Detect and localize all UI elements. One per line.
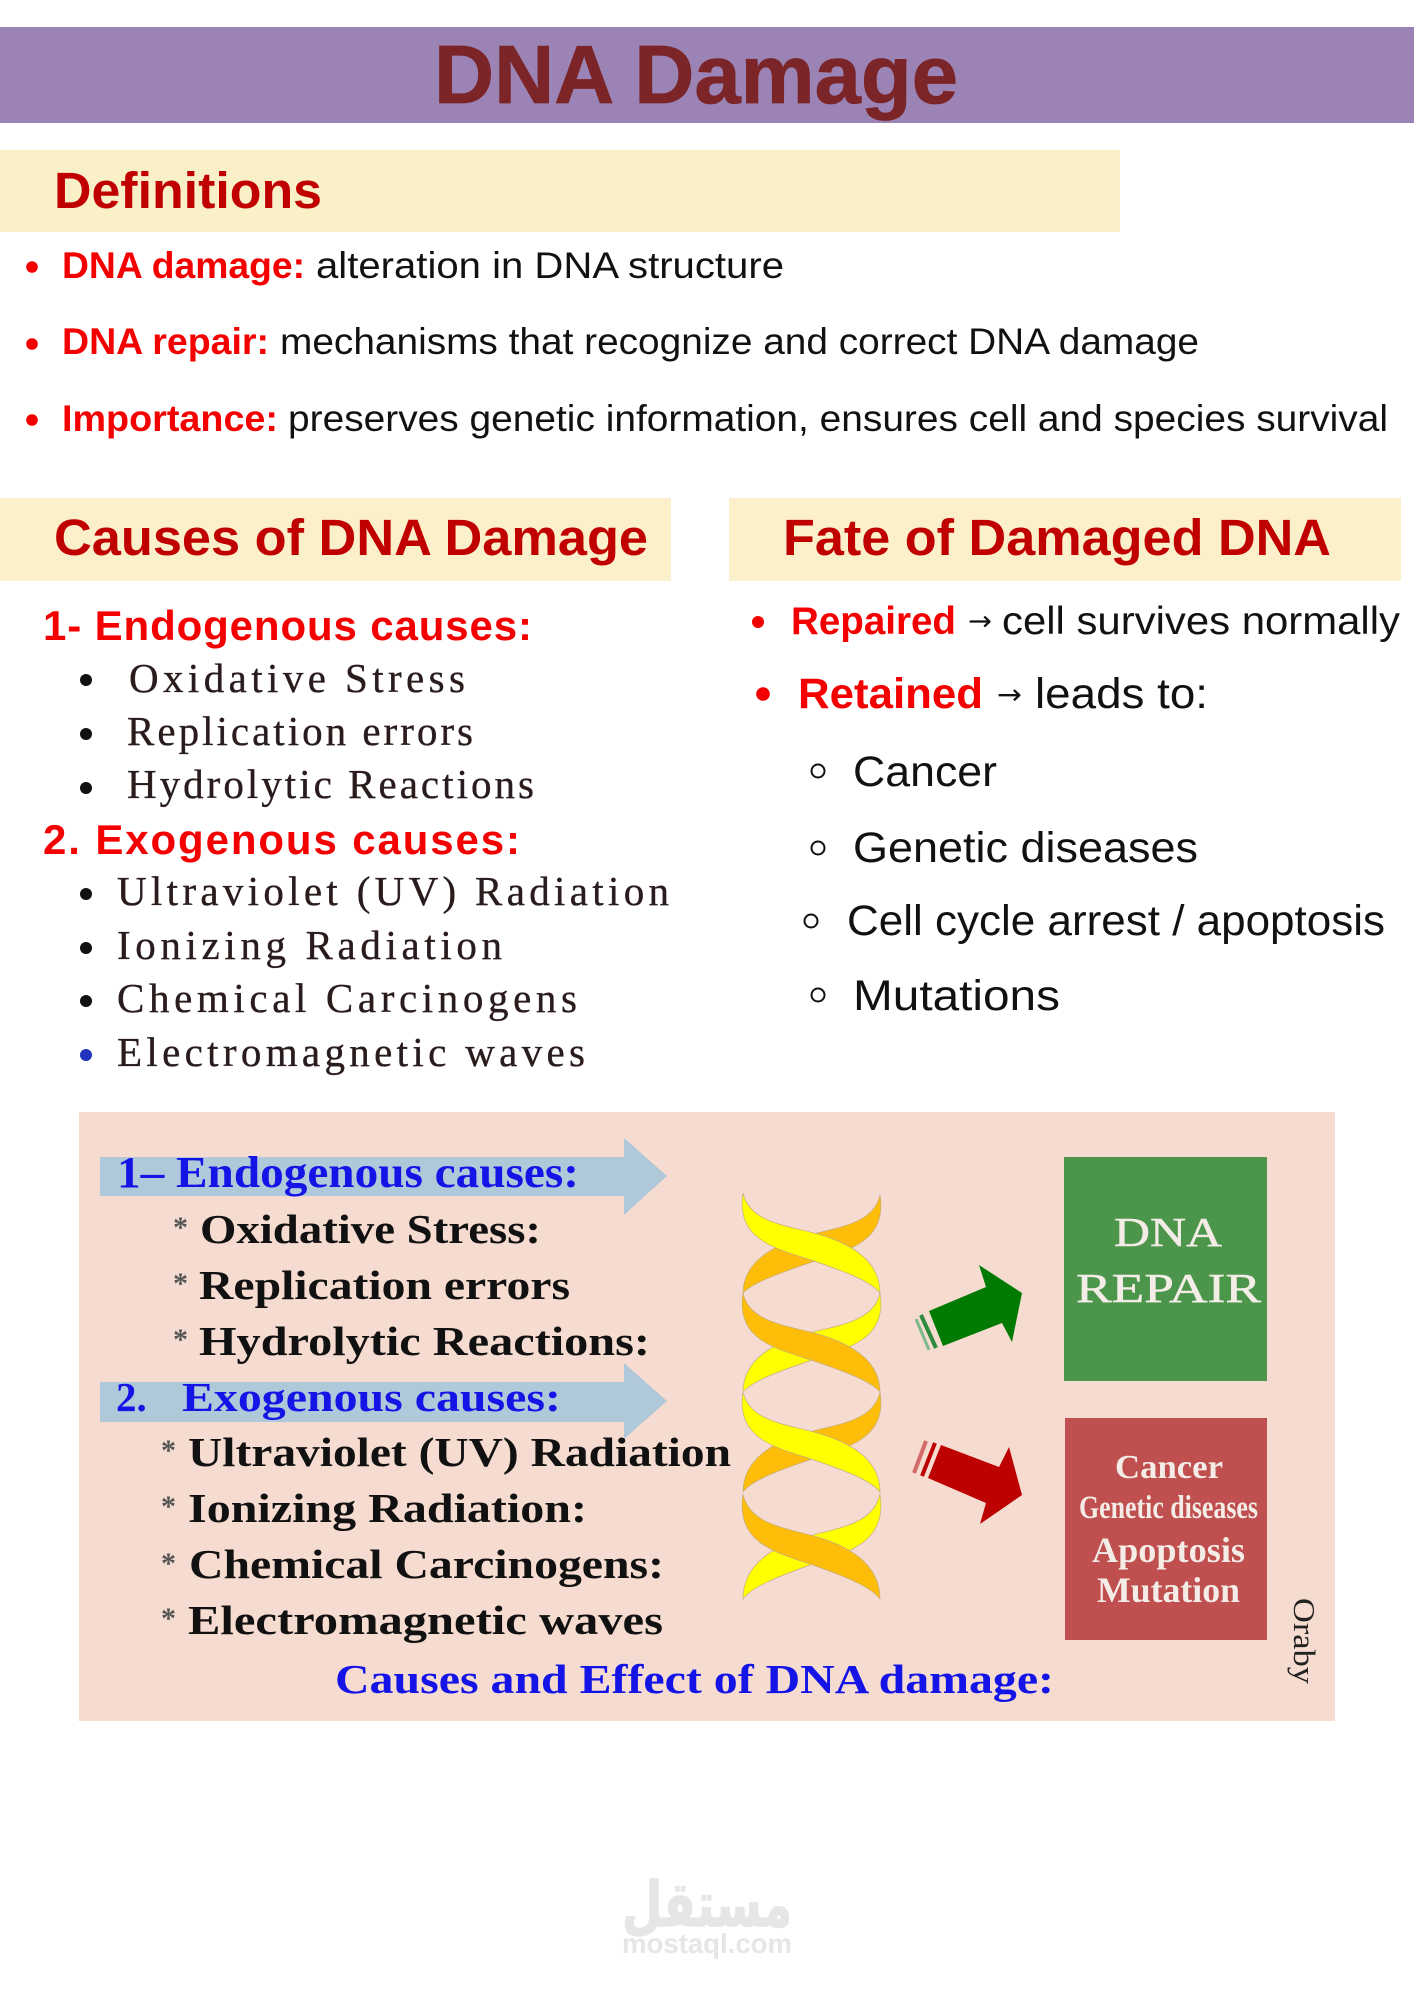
causes list: Electromagnetic waves xyxy=(117,1029,585,1075)
icon: DNA double helix xyxy=(742,1193,881,1599)
fate list: Repaired xyxy=(791,600,956,643)
fate list: cell survives normally xyxy=(1002,600,1401,643)
endogenous causes text: Hydrolytic Reactions: xyxy=(199,1318,650,1364)
definitions list xyxy=(26,245,1388,439)
box: DNA repair: DNA xyxy=(1114,1209,1222,1255)
exogenous causes text: Ultraviolet (UV) Radiation xyxy=(188,1429,731,1475)
heading: Definitions xyxy=(0,150,1120,232)
heading: Causes of DNA Damage xyxy=(0,498,671,581)
endogenous causes text: 1– Endogenous causes: xyxy=(117,1148,579,1197)
box: DNA repair xyxy=(1064,1157,1267,1381)
fate list: Mutations xyxy=(853,972,1060,1020)
arrow: exogenous banner xyxy=(100,1363,667,1439)
fate list: → xyxy=(968,606,992,637)
arrow: endogenous banner xyxy=(100,1138,667,1215)
exogenous causes text: Electromagnetic waves xyxy=(188,1597,663,1643)
credit: Oraby: Oraby xyxy=(1287,1598,1322,1685)
definitions list: mechanisms that recognize and correct DNA damage xyxy=(280,321,1199,362)
box: outcomes of retained damage: Cancer xyxy=(1115,1449,1223,1486)
definitions list: DNA repair: xyxy=(62,321,269,362)
fate list: Cancer xyxy=(853,748,997,796)
watermark: mostaql xyxy=(622,1868,792,1959)
causes list: Hydrolytic Reactions xyxy=(127,761,534,807)
box: outcomes of retained damage: Mutation xyxy=(1097,1570,1240,1610)
watermark: mostaql: مستقل xyxy=(622,1868,792,1941)
endogenous causes text xyxy=(117,1148,650,1364)
endogenous causes text: * xyxy=(173,1267,188,1300)
exogenous causes text: 2. xyxy=(116,1374,147,1420)
panel: causes and effect diagram xyxy=(79,1112,1335,1721)
exogenous causes text: Ionizing Radiation: xyxy=(188,1485,587,1531)
endogenous causes text: Oxidative Stress: xyxy=(200,1206,541,1252)
caption: Causes and Effect of DNA damage: xyxy=(335,1656,1054,1702)
arrow: red to damage outcomes xyxy=(914,1441,1022,1524)
definitions list: Importance: xyxy=(62,398,278,439)
endogenous causes text: * xyxy=(173,1323,188,1356)
box: outcomes of retained damage: Apoptosis xyxy=(1092,1530,1245,1570)
fate list: Cell cycle arrest / apoptosis xyxy=(847,897,1385,945)
fate list xyxy=(752,600,1401,1020)
causes list: Chemical Carcinogens xyxy=(117,975,577,1021)
watermark: mostaql: mostaql.com xyxy=(622,1928,792,1959)
title banner: DNA Damage xyxy=(434,28,958,121)
exogenous causes text: Exogenous causes: xyxy=(182,1374,561,1420)
endogenous causes text: * xyxy=(173,1211,188,1244)
title banner xyxy=(0,27,1414,123)
causes list: Oxidative Stress xyxy=(129,655,465,701)
exogenous causes text: Chemical Carcinogens: xyxy=(189,1541,664,1587)
box: outcomes of retained damage: Genetic diseases xyxy=(1079,1490,1258,1526)
fate list: Genetic diseases xyxy=(853,824,1198,872)
endogenous causes text: Replication errors xyxy=(199,1262,570,1308)
causes list: Ionizing Radiation xyxy=(117,922,502,968)
arrow: green to repair xyxy=(916,1265,1022,1350)
box: outcomes of retained damage xyxy=(1065,1418,1267,1640)
heading: Causes of DNA Damage: Causes of DNA Damage xyxy=(54,509,648,566)
causes list: Ultraviolet (UV) Radiation xyxy=(117,868,669,914)
causes list: 2. Exogenous causes: xyxy=(43,816,520,863)
fate list: leads to: xyxy=(1035,670,1208,718)
fate list: → xyxy=(997,678,1022,711)
exogenous causes text: * xyxy=(161,1602,176,1635)
exogenous causes text: * xyxy=(161,1547,176,1580)
heading: Definitions: Definitions xyxy=(54,162,322,219)
causes list: 1- Endogenous causes: xyxy=(43,602,532,649)
definitions list: preserves genetic information, ensures cell and species survival xyxy=(288,398,1388,439)
heading: Fate of Damaged DNA xyxy=(729,498,1401,581)
definitions list: alteration in DNA structure xyxy=(316,245,784,286)
exogenous causes text: * xyxy=(161,1434,176,1467)
exogenous causes text xyxy=(116,1374,731,1643)
exogenous causes text: * xyxy=(161,1490,176,1523)
causes list: Replication errors xyxy=(127,708,473,754)
causes list xyxy=(43,602,669,1075)
heading: Fate of Damaged DNA: Fate of Damaged DNA xyxy=(783,509,1331,566)
fate list: Retained xyxy=(798,670,983,718)
box: DNA repair: REPAIR xyxy=(1076,1265,1262,1311)
definitions list: DNA damage: xyxy=(62,245,305,286)
